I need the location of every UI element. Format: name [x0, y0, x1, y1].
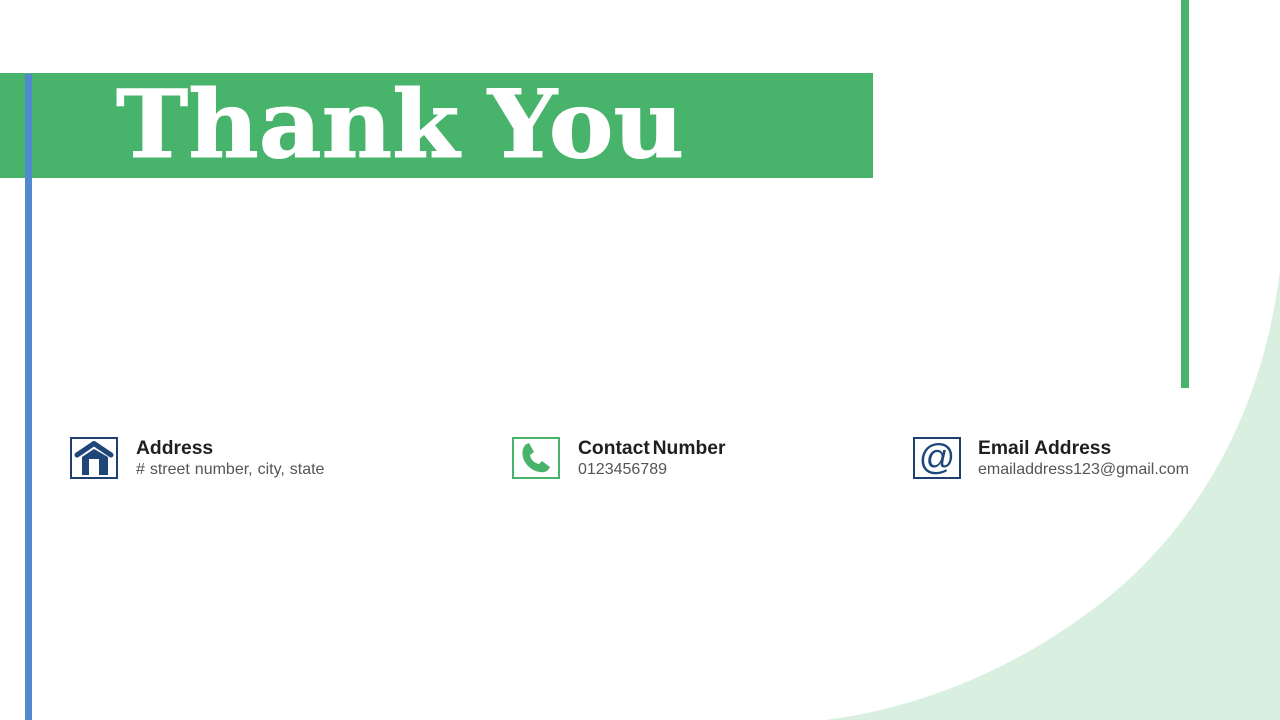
- title: Thank You: [116, 70, 684, 180]
- address text: # street number, city, state: [136, 461, 324, 478]
- contact item: address: [70, 437, 324, 479]
- contact heading: Contact Number: [578, 438, 725, 459]
- green vertical bar: [1181, 0, 1189, 388]
- contact item: phone: [512, 437, 726, 479]
- icon: house: [70, 437, 118, 479]
- blue vertical bar: [25, 74, 32, 720]
- phone number: 0123456789: [578, 461, 667, 478]
- icon: at sign: @: [919, 436, 955, 477]
- icon: phone: [512, 437, 560, 479]
- email text: emailaddress123@gmail.com: [978, 461, 1189, 478]
- email heading: Email Address: [978, 438, 1111, 459]
- title banner: [0, 73, 873, 178]
- contact item: email: [913, 436, 1189, 479]
- address heading: Address: [136, 438, 213, 459]
